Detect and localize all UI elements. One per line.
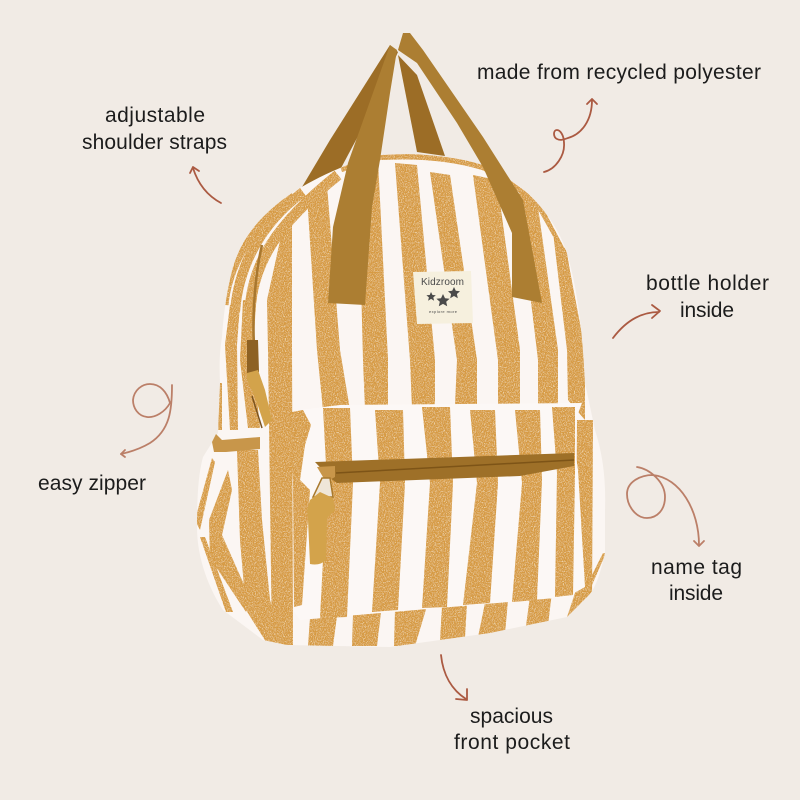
arrow: easy zipper bbox=[121, 384, 172, 457]
main zipper seam bbox=[253, 245, 262, 345]
upper stripes bbox=[267, 212, 293, 645]
label: spacious front pocket: spacious bbox=[470, 705, 553, 728]
label: spacious front pocket: front pocket bbox=[454, 731, 570, 754]
main zipper pull bbox=[247, 340, 272, 428]
lower left panel stripes bbox=[237, 450, 272, 642]
pocket panel bbox=[293, 403, 585, 620]
bag body bbox=[197, 154, 605, 647]
bottom panel stripes bbox=[308, 616, 337, 646]
side panel stripes bbox=[225, 305, 240, 430]
label: easy zipper: easy zipper bbox=[38, 472, 146, 495]
label: bottle holder inside: inside bbox=[680, 299, 734, 322]
label: adjustable shoulder straps: shoulder straps bbox=[82, 131, 227, 154]
label: spacious front pocket bbox=[454, 705, 570, 754]
handle straps front bbox=[328, 33, 542, 305]
arrow: name tag bbox=[627, 467, 704, 546]
arrow: shoulder straps bbox=[190, 167, 221, 203]
label: name tag inside: inside bbox=[669, 582, 723, 605]
label: adjustable shoulder straps bbox=[82, 104, 227, 154]
pocket zipper pull bbox=[307, 466, 335, 564]
top and side piping bbox=[382, 154, 571, 276]
brand label: explore more bbox=[429, 309, 458, 314]
brand label bbox=[413, 271, 473, 324]
gold stripes bbox=[195, 153, 606, 646]
label: made from recycled polyester: made from recycled polyester bbox=[477, 61, 761, 84]
front pocket bbox=[291, 403, 585, 620]
label: adjustable shoulder straps: adjustable bbox=[105, 104, 205, 127]
arrow: front pocket bbox=[441, 655, 467, 700]
label: name tag inside bbox=[651, 556, 742, 605]
elastic side band bbox=[212, 434, 260, 452]
label stars bbox=[426, 287, 460, 306]
backpack bbox=[195, 33, 606, 647]
arrow: bottle holder bbox=[613, 305, 660, 338]
label: name tag inside: name tag bbox=[651, 556, 742, 579]
arrow: recycled polyester bbox=[544, 99, 597, 172]
brand label: Kidzroom bbox=[421, 277, 464, 288]
back handle straps bbox=[302, 45, 445, 187]
label: bottle holder inside: bottle holder bbox=[646, 272, 769, 295]
label: bottle holder inside bbox=[646, 272, 769, 322]
pocket zipper bbox=[315, 453, 574, 483]
